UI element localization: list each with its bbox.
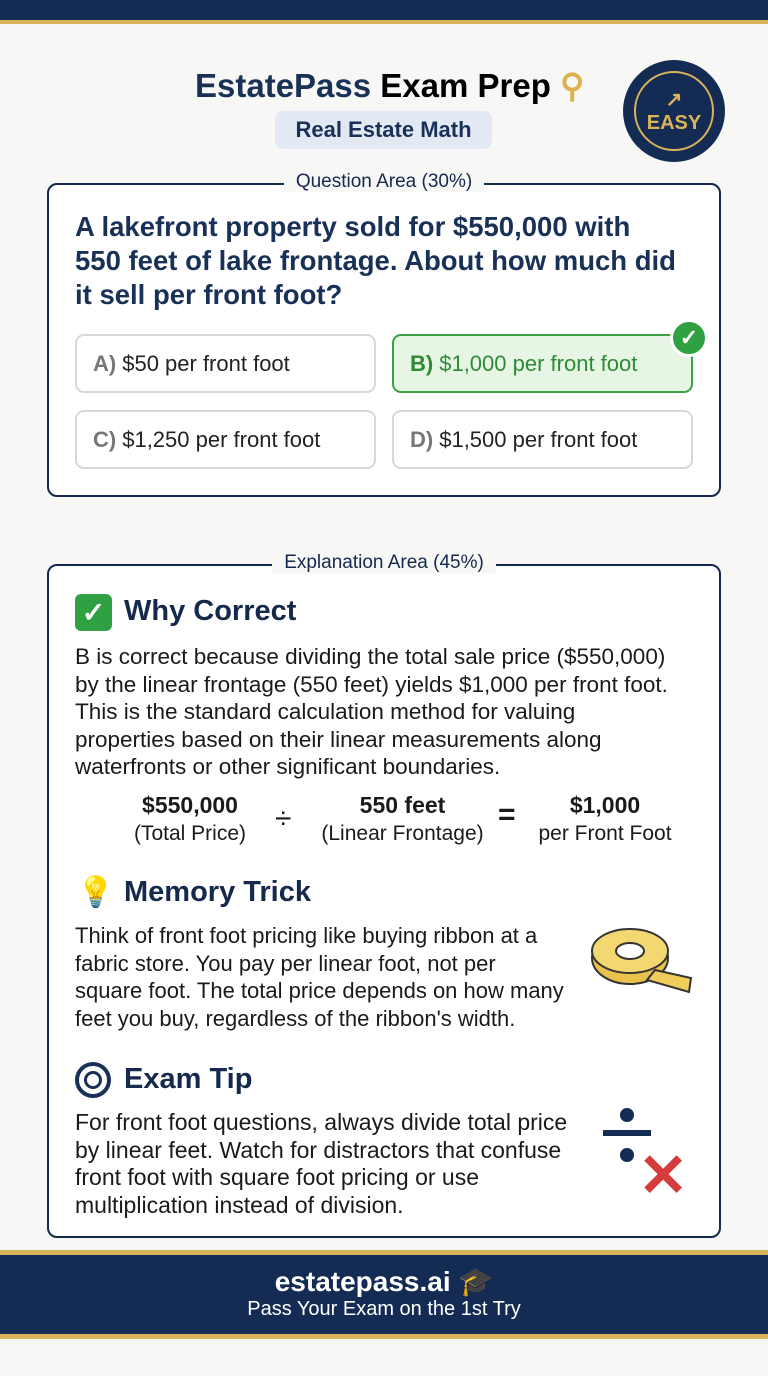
why text: waterfronts or other significant boundaries.: [75, 754, 500, 779]
check badge: ✓: [680, 325, 698, 350]
icon: target: [75, 1062, 111, 1098]
why text: properties based on their linear measurements along: [75, 726, 602, 752]
memory text: [75, 923, 564, 1030]
footer tagline: Pass Your Exam on the 1st Try: [247, 1298, 521, 1320]
option C: C) $1,250 per front foot: [93, 427, 320, 452]
explanation legend: Explanation Area (45%): [284, 552, 484, 573]
subtitle pill: Real Estate Math: [295, 117, 472, 142]
option D: [392, 410, 693, 469]
option A: [75, 334, 376, 393]
badge: easy: EASY: [647, 112, 701, 134]
tip text: by linear feet. Watch for distractors that confuse: [75, 1136, 561, 1162]
formula: (Total Price): [134, 822, 246, 845]
formula: $550,000: [142, 792, 238, 818]
formula: 550 feet: [360, 792, 445, 818]
why text: This is the standard calculation method for valuing: [75, 699, 575, 724]
option A: A) $50 per front foot: [93, 351, 290, 376]
formula: [134, 792, 672, 845]
footer brand: estatepass.ai 🎓: [275, 1266, 493, 1297]
option C: [75, 410, 376, 469]
question text: A lakefront property sold for $550,000 with: [75, 211, 630, 242]
icon: divide with x: [603, 1108, 688, 1209]
option B correct: B) $1,000 per front foot: [410, 351, 637, 376]
option B correct: [392, 334, 693, 393]
why text: by the linear frontage (550 feet) yields $1,000 per front foot.: [75, 672, 668, 696]
why text: [75, 644, 668, 779]
formula: per Front Foot: [538, 822, 672, 845]
tip text: front foot with square foot pricing or use: [75, 1164, 479, 1190]
question panel: [47, 183, 721, 497]
icon: check: [75, 594, 112, 631]
why text: B is correct because dividing the total sale price ($550,000): [75, 644, 665, 669]
subtitle pill: [275, 111, 492, 149]
tip text: multiplication instead of division.: [75, 1192, 404, 1218]
question text: 550 feet of lake frontage. About how much did: [75, 245, 676, 276]
top bar: [0, 0, 768, 24]
memory text: square foot. The total price depends on how many: [75, 978, 564, 1003]
badge: easy: ↗: [666, 89, 682, 111]
footer: [0, 1250, 768, 1339]
heading exam tip: Exam Tip: [124, 1063, 252, 1095]
question text: [75, 211, 676, 310]
check badge: [670, 319, 708, 357]
badge: easy: [625, 62, 723, 160]
explanation panel: [47, 564, 721, 1238]
formula: $1,000: [570, 792, 640, 818]
formula: (Linear Frontage): [321, 822, 484, 845]
tip text: [75, 1109, 567, 1218]
icon: check: ✓: [82, 597, 105, 628]
question legend: Question Area (30%): [296, 171, 472, 192]
memory text: feet you buy, regardless of the ribbon's width.: [75, 1006, 515, 1030]
option D: D) $1,500 per front foot: [410, 427, 637, 452]
icon: divide with x: ✕: [638, 1142, 688, 1209]
memory text: fabric store. You pay per linear foot, not per: [75, 950, 496, 976]
heading memory: Memory Trick: [124, 876, 311, 908]
memory text: Think of front foot pricing like buying ribbon at a: [75, 923, 537, 948]
formula: ÷: [275, 802, 291, 835]
title: EstatePass Exam Prep ⚲: [195, 67, 584, 104]
icon: bulb: 💡: [77, 876, 114, 909]
formula: =: [498, 798, 516, 831]
heading why correct: Why Correct: [124, 595, 296, 627]
tip text: For front foot questions, always divide total price: [75, 1109, 567, 1135]
question text: it sell per front foot?: [75, 279, 342, 310]
icon: tape measure: [591, 928, 692, 994]
